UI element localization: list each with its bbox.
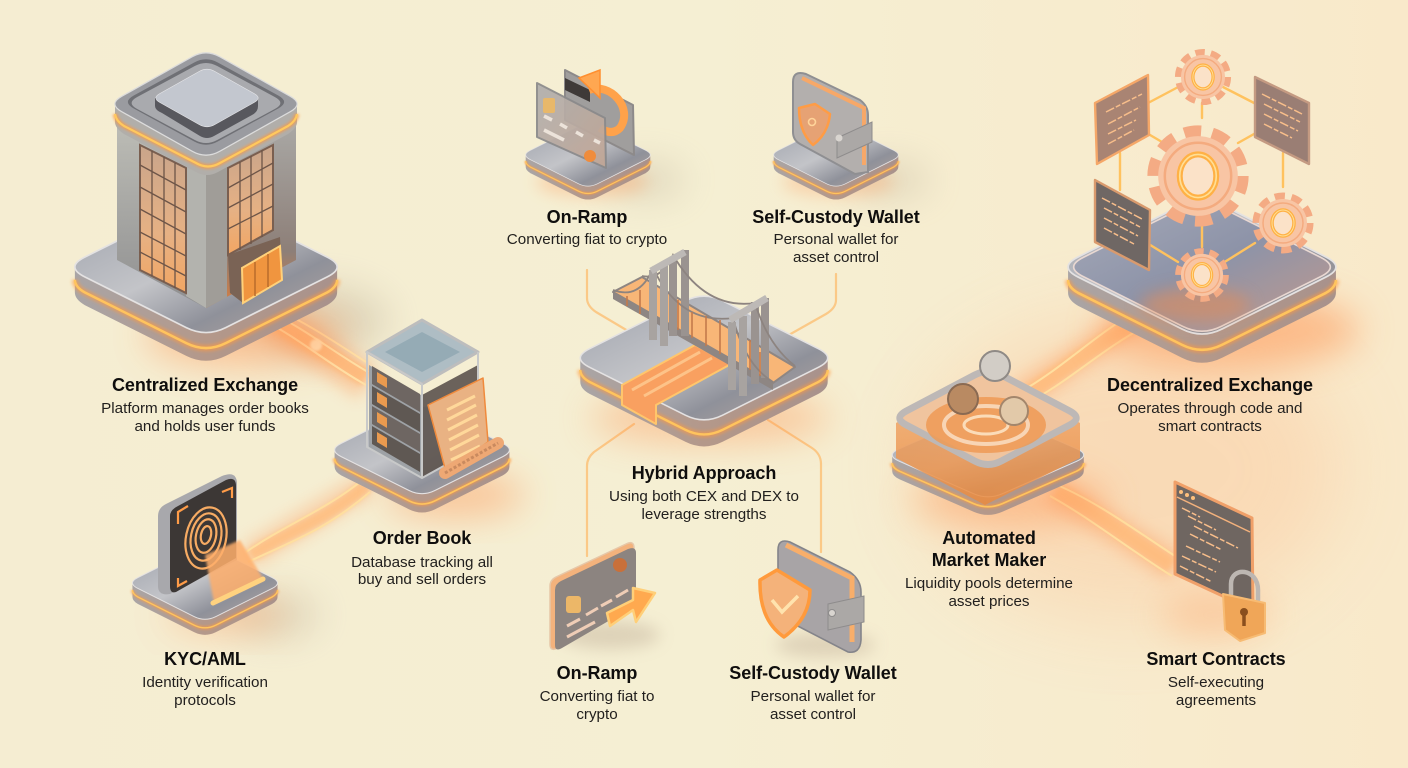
text: On-Ramp bottom: On-Ramp	[557, 663, 637, 683]
icon: on-ramp card top	[526, 70, 650, 200]
icon: centralized exchange building	[75, 53, 345, 367]
text: Centralized Exchange: Platform manages order books	[101, 400, 309, 417]
bridge deck	[613, 277, 795, 383]
text: Self-Custody Wallet bottom	[729, 663, 897, 723]
icon: KYC fingerprint device	[132, 474, 285, 635]
platform	[580, 296, 828, 446]
cables	[613, 255, 795, 382]
icon: smart contract and lock	[1160, 482, 1270, 641]
wallet body	[778, 541, 861, 652]
text: KYC/AML: Identity verification	[142, 674, 268, 691]
receipt scroll	[428, 378, 488, 472]
icon: self-custody wallet bottom	[760, 541, 875, 657]
soft cast shadows	[230, 162, 930, 637]
text: On-Ramp top: Converting fiat to crypto	[507, 231, 667, 248]
gear: bottom	[1180, 253, 1224, 297]
icon: suspension bridge platform	[580, 250, 830, 446]
background glow: right side warm wash	[920, 320, 1340, 620]
text: KYC/AML: KYC/AML	[164, 649, 246, 669]
text: Order Book	[351, 528, 493, 588]
text: Automated Market Maker	[905, 528, 1073, 610]
card edge	[550, 543, 634, 649]
text: On-Ramp bottom	[540, 663, 654, 723]
code panel: lower left	[1095, 180, 1150, 270]
text: Self-Custody Wallet bottom: Self-Custody Wallet	[729, 663, 897, 683]
links between nodes	[1120, 85, 1283, 263]
coin: bronze	[948, 384, 978, 414]
code panel: upper left	[1095, 75, 1149, 164]
platform	[774, 124, 898, 200]
left window grid	[140, 145, 186, 293]
arrow	[607, 588, 655, 626]
text: Hybrid Approach	[609, 463, 799, 523]
right window grid	[228, 145, 273, 255]
energy stream: exchange to order book	[262, 308, 368, 385]
shield	[760, 570, 810, 637]
text: KYC/AML	[142, 649, 268, 709]
text: Centralized Exchange: and holds user funds	[134, 418, 276, 435]
text: Self-Custody Wallet top: Self-Custody Wallet	[752, 207, 920, 227]
code panel: upper right	[1255, 77, 1309, 164]
glowing road	[622, 345, 731, 424]
front tower	[653, 264, 743, 396]
code document	[1175, 482, 1253, 610]
gear: top	[1180, 54, 1226, 100]
text: On-Ramp top	[507, 207, 667, 248]
back tower	[673, 250, 765, 384]
rack units	[369, 365, 421, 478]
text: Smart Contracts: Self-executing	[1168, 674, 1264, 691]
text: Smart Contracts	[1146, 649, 1286, 709]
energy stream: market maker to smart contracts	[1050, 482, 1176, 576]
icon: self-custody wallet top	[774, 73, 898, 200]
connector lines: hybrid links	[587, 270, 836, 556]
text: On-Ramp bottom: Converting fiat to	[540, 688, 654, 705]
text: Order Book: Database tracking all	[351, 554, 493, 571]
text: Centralized Exchange	[101, 375, 309, 435]
card face	[555, 548, 636, 649]
text: Self-Custody Wallet top: asset control	[793, 249, 879, 266]
shield	[799, 104, 830, 145]
return arrow	[589, 89, 624, 132]
entrance	[228, 237, 282, 303]
text: Order Book: Order Book	[373, 528, 472, 548]
platform	[335, 406, 509, 513]
back card	[565, 70, 634, 155]
text: Self-Custody Wallet bottom: asset control	[770, 706, 856, 723]
text: On-Ramp top: On-Ramp	[547, 207, 627, 227]
text: Decentralized Exchange: Decentralized Exchange	[1107, 375, 1313, 395]
text: Decentralized Exchange	[1107, 375, 1313, 435]
text: Hybrid Approach: Using both CEX and DEX to	[609, 488, 799, 505]
text: Automated Market Maker: Liquidity pools determine	[905, 575, 1073, 592]
gear: main	[1156, 134, 1240, 218]
energy stream: market maker to decentralized exchange	[1018, 312, 1146, 404]
text: Self-Custody Wallet top: Personal wallet for	[774, 231, 898, 248]
glass platform	[1068, 200, 1336, 363]
coin: pale gold	[1000, 397, 1028, 425]
text: Decentralized Exchange: smart contracts	[1158, 418, 1262, 435]
text: Order Book: buy and sell orders	[358, 571, 487, 588]
text: Self-Custody Wallet bottom: Personal wallet for	[751, 688, 875, 705]
text: KYC/AML: protocols	[174, 692, 236, 709]
base	[892, 413, 1084, 515]
text: Self-Custody Wallet top	[752, 207, 920, 266]
energy stream: KYC to order book	[246, 482, 370, 562]
icon: order book server	[335, 320, 525, 517]
wallet clasp	[837, 122, 872, 158]
platform	[526, 124, 650, 200]
device	[158, 474, 237, 594]
text: Automated Market Maker: asset prices	[948, 593, 1030, 610]
wallet clasp	[828, 596, 864, 630]
text: Centralized Exchange: Centralized Exchange	[112, 375, 298, 395]
text: Smart Contracts: agreements	[1176, 692, 1257, 709]
gear: lower right	[1258, 198, 1308, 248]
text: Decentralized Exchange: Operates through code and	[1118, 400, 1302, 417]
fingerprint	[178, 488, 232, 586]
platform	[132, 547, 278, 635]
icon: automated market maker pool	[892, 351, 1110, 526]
text: Automated Market Maker: Automated	[942, 528, 1036, 548]
platform	[75, 201, 337, 361]
text: Hybrid Approach: leverage strengths	[642, 506, 767, 523]
padlock	[1231, 572, 1258, 606]
icon: on-ramp card bottom	[550, 543, 660, 649]
text: Automated Market Maker: Market Maker	[932, 550, 1046, 570]
text: Smart Contracts: Smart Contracts	[1146, 649, 1286, 669]
roof	[115, 104, 297, 175]
front card	[537, 83, 606, 168]
coin: silver	[980, 351, 1010, 381]
ripples	[926, 397, 1046, 453]
wallet body	[793, 73, 868, 174]
text: Hybrid Approach: Hybrid Approach	[632, 463, 776, 483]
text: On-Ramp bottom: crypto	[576, 706, 618, 723]
icon: decentralized exchange gears	[1068, 54, 1360, 368]
water volume	[896, 370, 1080, 505]
